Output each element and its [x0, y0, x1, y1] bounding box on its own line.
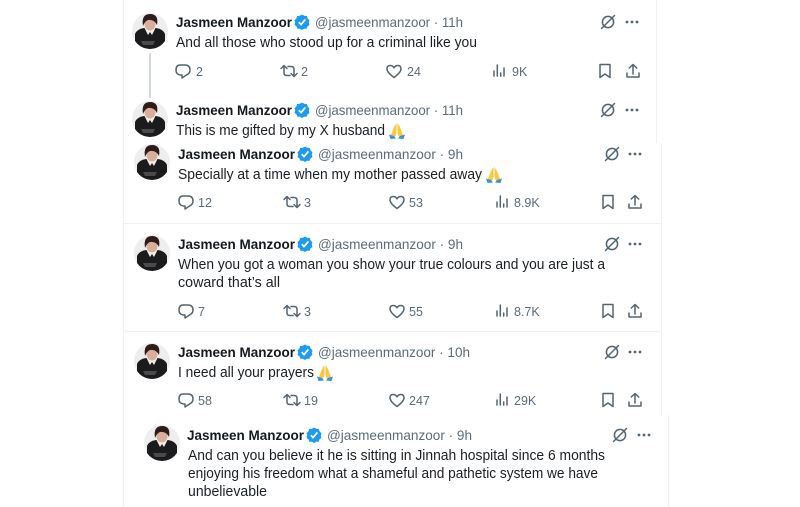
action bar: 2: [196, 65, 203, 79]
tweet 6: [144, 425, 650, 500]
avatar: [134, 144, 170, 180]
top right icons: [614, 428, 650, 442]
tweet text: unbelievable: [188, 484, 267, 500]
name and handle: @jasmeenmanzoor · 10h: [318, 344, 470, 360]
name and handle: Jasmeen Manzoor: [178, 344, 296, 360]
avatar: [132, 13, 168, 49]
action bar: 55: [409, 305, 423, 319]
action bar: [179, 196, 641, 210]
avatar: [144, 425, 180, 461]
name and handle: @jasmeenmanzoor · 9h: [318, 146, 463, 162]
top right icons: [606, 238, 641, 250]
panel edges: [124, 0, 668, 507]
thread connector line: [149, 53, 151, 98]
tweet text: And can you believe it he is sitting in Jinnah hospital since 6 months: [188, 448, 605, 464]
tweet text: Specially at a time when my mother passed away: [178, 167, 483, 183]
top right icons: [602, 104, 638, 116]
tweet text: When you got a woman you show your true colours and you are just a: [178, 257, 605, 273]
name and handle: [176, 14, 463, 30]
action bar: 53: [409, 196, 423, 210]
name and handle: [178, 146, 463, 162]
name and handle: [178, 344, 470, 360]
tweet text: enjoying his freedom what a shameful and pathetic system we have: [188, 466, 598, 482]
tweet 5: [134, 343, 641, 408]
tweet text: This is me gifted by my X husband: [176, 123, 385, 139]
name and handle: @jasmeenmanzoor · 11h: [315, 102, 463, 118]
action bar: 8.9K: [514, 196, 540, 210]
action bar: [179, 394, 641, 408]
action bar: 29K: [514, 394, 537, 408]
action bar: [179, 304, 641, 319]
name and handle: Jasmeen Manzoor: [176, 14, 293, 30]
tweet 2: [132, 101, 638, 139]
name and handle: [176, 102, 463, 118]
action bar: 24: [407, 65, 421, 79]
name and handle: [187, 427, 472, 443]
top right icons: [602, 16, 638, 28]
name and handle: Jasmeen Manzoor: [187, 427, 305, 443]
name and handle: Jasmeen Manzoor: [178, 146, 296, 162]
top right icons: [606, 148, 641, 160]
tweet text: [188, 448, 605, 500]
name and handle: @jasmeenmanzoor · 9h: [318, 236, 463, 252]
action bar: 9K: [512, 65, 528, 79]
name and handle: @jasmeenmanzoor · 9h: [327, 427, 472, 443]
action bar: 2: [301, 65, 308, 79]
action bar: 58: [198, 394, 212, 408]
tweet text: coward that’s all: [178, 275, 280, 291]
action bar: 3: [304, 196, 311, 210]
top right icons: [606, 346, 641, 358]
action bar: 3: [304, 305, 311, 319]
action bar: [176, 64, 639, 79]
action bar: 12: [198, 196, 212, 210]
avatar: [132, 101, 168, 137]
avatar: [134, 343, 170, 379]
tweet 3: [134, 144, 641, 210]
tweet text: I need all your prayers: [178, 365, 314, 381]
name and handle: [178, 236, 463, 252]
avatar: [134, 235, 170, 271]
name and handle: @jasmeenmanzoor · 11h: [315, 14, 463, 30]
action bar: 8.7K: [514, 305, 540, 319]
action bar: 19: [304, 394, 318, 408]
tweet 1: [132, 13, 639, 79]
tweet text: And all those who stood up for a criminal like you: [176, 35, 477, 51]
tweet text: [178, 257, 605, 291]
tweet 4: [134, 235, 641, 319]
name and handle: Jasmeen Manzoor: [178, 236, 296, 252]
name and handle: Jasmeen Manzoor: [176, 102, 293, 118]
action bar: 247: [409, 394, 430, 408]
action bar: 7: [198, 305, 205, 319]
